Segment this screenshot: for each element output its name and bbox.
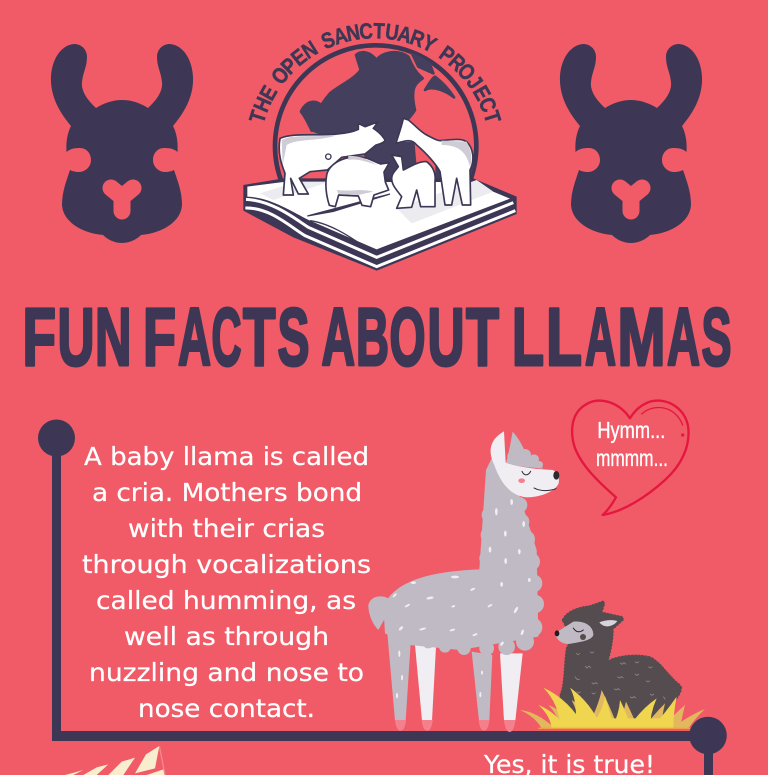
logo wordmark: R bbox=[407, 26, 428, 53]
horse shading bbox=[442, 141, 471, 167]
llama face details bbox=[522, 471, 556, 491]
illustration: clapperboard bbox=[65, 746, 165, 775]
logo: The Open Sanctuary Project bbox=[243, 20, 517, 271]
title: O bbox=[390, 292, 426, 383]
title: T bbox=[466, 292, 499, 383]
llama nose bbox=[553, 471, 559, 480]
baby llama body bbox=[560, 603, 680, 723]
title: S bbox=[278, 292, 310, 383]
logo wordmark: Y bbox=[418, 31, 440, 58]
grass tan layer bbox=[520, 690, 705, 728]
icon: left llama head bbox=[51, 44, 193, 243]
logo wordmark: O bbox=[267, 63, 295, 89]
cow bbox=[279, 122, 385, 195]
logo wordmark: N bbox=[344, 21, 362, 47]
text block: baby llama fact: well as through bbox=[124, 622, 329, 651]
logo wordmark: E bbox=[256, 82, 283, 105]
logo wordmark: A bbox=[331, 23, 351, 50]
illustration: adult llama bbox=[368, 431, 559, 732]
text block: baby llama fact bbox=[82, 442, 371, 723]
pig bbox=[326, 157, 389, 207]
speech bubble text: mmmm... bbox=[596, 445, 668, 471]
timeline connector bbox=[38, 420, 727, 775]
logo wordmark: E bbox=[468, 82, 494, 105]
llama cheek bbox=[518, 478, 525, 483]
icon: right llama nose bbox=[620, 188, 642, 211]
text block: baby llama fact: A baby llama is called bbox=[84, 442, 369, 471]
text block: baby llama fact: a cria. Mothers bond bbox=[92, 478, 362, 507]
grass yellow layer bbox=[538, 688, 677, 728]
open book bbox=[243, 178, 517, 271]
title: U bbox=[428, 292, 464, 383]
icon: left llama nose bbox=[111, 188, 133, 211]
speech bubble text: Hymm... bbox=[597, 417, 665, 443]
title: L bbox=[546, 292, 582, 383]
llama tail bbox=[368, 596, 388, 630]
logo wordmark: R bbox=[444, 50, 470, 77]
rooster bbox=[392, 155, 435, 208]
baby llama ear bbox=[599, 620, 617, 626]
logo wordmark: H bbox=[250, 94, 277, 116]
logo wordmark: J bbox=[461, 71, 487, 94]
text block: baby llama fact: called humming, as bbox=[96, 586, 356, 615]
text block: baby llama fact: through vocalizations bbox=[82, 550, 371, 579]
logo animals bbox=[279, 118, 473, 208]
grass base bbox=[538, 728, 690, 729]
title: M bbox=[618, 292, 666, 383]
logo wordmark: A bbox=[395, 22, 414, 49]
logo wordmark: C bbox=[358, 20, 374, 45]
speech bubble text bbox=[596, 417, 668, 471]
logo wordmark: P bbox=[277, 54, 303, 79]
baby llama face bbox=[555, 622, 593, 644]
logo wordmark: C bbox=[473, 94, 500, 116]
llama legs bbox=[385, 607, 523, 732]
pig tail bbox=[326, 154, 331, 159]
text block: baby llama fact: with their crias bbox=[128, 514, 325, 543]
text block: baby llama fact: nuzzling and nose to bbox=[89, 658, 364, 687]
logo wordmark: T bbox=[478, 108, 504, 127]
logo wordmark: T bbox=[246, 108, 272, 126]
title: A bbox=[322, 292, 355, 383]
title: N bbox=[95, 292, 132, 383]
title: F bbox=[22, 292, 56, 383]
baby llama nose bbox=[555, 630, 559, 636]
cow shading bbox=[282, 135, 337, 165]
title: A bbox=[178, 292, 211, 383]
baby llama fleece marks bbox=[575, 652, 665, 699]
title: T bbox=[243, 292, 276, 383]
icon: right llama head bbox=[560, 44, 702, 243]
llama fleece body bbox=[383, 458, 544, 656]
logo wordmark: P bbox=[435, 42, 459, 68]
logo wordmark bbox=[246, 20, 504, 127]
baby llama eye and cheek bbox=[573, 628, 586, 640]
pig shading bbox=[337, 156, 377, 195]
title: F bbox=[143, 292, 176, 383]
speech bubble: heart bbox=[572, 401, 689, 515]
logo wordmark: U bbox=[384, 20, 400, 46]
logo wordmark: O bbox=[452, 59, 480, 86]
logo wordmark: T bbox=[373, 20, 386, 44]
llama head tuft and ear bbox=[506, 432, 543, 469]
title: A bbox=[585, 292, 616, 383]
logo wordmark: S bbox=[318, 28, 339, 54]
illustration: baby llama with grass bbox=[520, 603, 705, 729]
title: U bbox=[58, 292, 94, 383]
title: L bbox=[512, 292, 544, 383]
horse bbox=[396, 118, 473, 205]
title: S bbox=[702, 292, 732, 383]
globe bbox=[272, 43, 479, 180]
title bbox=[22, 292, 732, 383]
llama fleece marks bbox=[392, 499, 531, 698]
title: B bbox=[356, 292, 389, 383]
logo wordmark: N bbox=[298, 37, 322, 64]
text block: baby llama fact: nose contact. bbox=[138, 694, 315, 723]
llama head bbox=[491, 431, 559, 497]
title: A bbox=[667, 292, 700, 383]
logo wordmark: E bbox=[287, 45, 312, 71]
title: C bbox=[212, 292, 242, 383]
